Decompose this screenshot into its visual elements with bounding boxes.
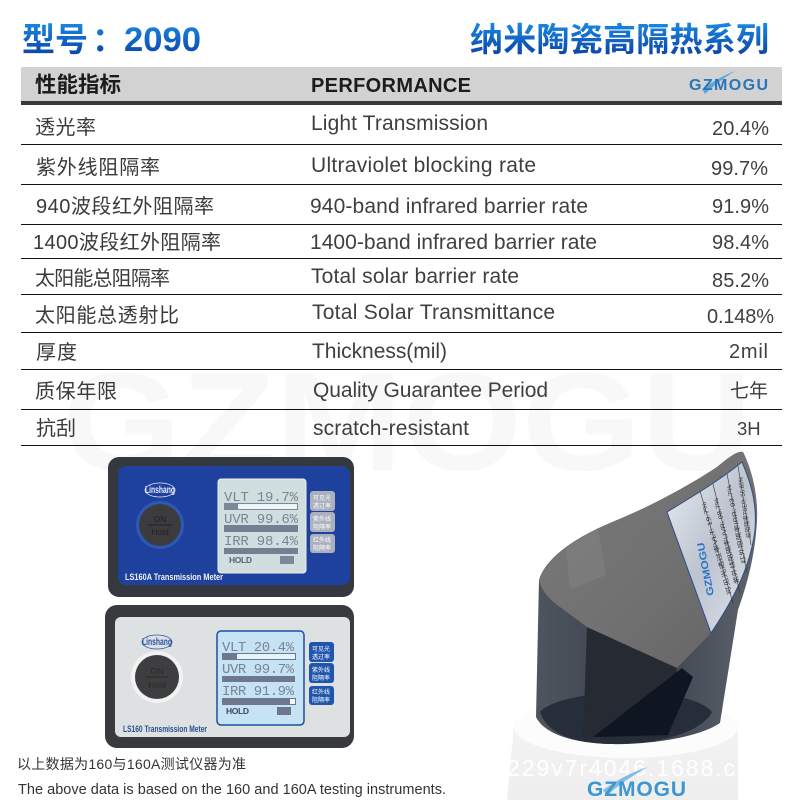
- row: guarantee period: [35, 379, 768, 403]
- film folded flap: [539, 452, 757, 668]
- meter side labels: 阻隔率: [313, 523, 331, 531]
- row: scratch resistance: 3H: [737, 418, 761, 439]
- row: 940-band infrared: 940波段红外阻隔率: [36, 195, 214, 218]
- meter power button: ON: [151, 666, 163, 676]
- meter screen: IRR 98.4%: [224, 534, 299, 550]
- row: total solar transmittance: 0.148%: [707, 306, 774, 328]
- row: 1400-band infrared: 98.4%: [712, 232, 769, 254]
- row: 940-band infrared: 940-band infrared barrier rate: [310, 195, 588, 218]
- film sample rolled: [536, 452, 757, 744]
- row: thickness: 2mil: [729, 341, 768, 363]
- watermark: large faint logo: GZMOGU: [62, 343, 752, 500]
- meter screen: UVR 99.7%: [222, 662, 295, 678]
- title: series name: 纳米陶瓷高隔热系列: [470, 21, 769, 58]
- row: thickness: [36, 340, 768, 364]
- film dark inner strip: [583, 627, 677, 737]
- row: guarantee period: Quality Guarantee Period: [313, 379, 548, 402]
- label data lines: 红外阻隔率IRR: 93.7%: [725, 483, 748, 564]
- meter logo: Linshang: [145, 485, 175, 496]
- pedestal: [507, 696, 738, 800]
- meter screen: IRR 91.9%: [222, 684, 295, 700]
- row: total solar barrier: Total solar barrier rate: [311, 265, 519, 288]
- row: total solar transmittance: [35, 301, 774, 328]
- meter logo: [142, 635, 172, 649]
- meter side labels: 可见光: [313, 494, 331, 502]
- meter side labels: 红外线: [313, 536, 331, 544]
- meter screen: [217, 631, 304, 725]
- meter side labels: 紫外线: [312, 666, 330, 674]
- title: model number: 2090: [124, 21, 201, 59]
- meter side labels: 可见光: [312, 645, 330, 653]
- title: model number: [22, 21, 201, 59]
- watermark: url text on pedestal: 229v7r4046.1688.c: [507, 755, 735, 781]
- meter side labels: 红外线: [312, 688, 330, 696]
- row: 940-band infrared: 91.9%: [712, 196, 769, 218]
- row: total solar barrier: 85.2%: [712, 270, 769, 292]
- row: scratch resistance: 抗刮: [36, 417, 76, 440]
- row: scratch resistance: [36, 417, 761, 440]
- header: English label: PERFORMANCE: [311, 75, 471, 97]
- meter model label: LS160 Transmission Meter: [123, 724, 207, 734]
- meter side labels: 阻隔率: [312, 674, 330, 682]
- meter power button: [131, 651, 183, 703]
- title: model number: 型号: [22, 21, 88, 58]
- row: thickness: 厚度: [36, 341, 77, 364]
- row: 1400-band infrared: [33, 231, 769, 254]
- row: total solar barrier: [35, 265, 769, 292]
- meter screen: HOLD: [226, 706, 249, 716]
- meter screen: VLT 19.7%: [224, 490, 299, 506]
- meter side labels: 透过率: [313, 502, 331, 510]
- film label: [667, 462, 755, 633]
- header: Chinese label: 性能指标: [35, 73, 121, 97]
- meter side labels: 紫外线: [313, 515, 331, 523]
- row: total solar transmittance: 太阳能总透射比: [35, 304, 179, 327]
- meter logo: [145, 483, 175, 497]
- row: thickness: Thickness(mil): [312, 340, 447, 363]
- meter power button: Hold: [148, 680, 166, 690]
- row: scratch resistance: scratch-resistant: [313, 417, 469, 440]
- row: light transmission: 20.4%: [712, 118, 769, 140]
- meter side labels: 透过率: [312, 653, 330, 661]
- row: 1400-band infrared: 1400-band infrared barrier rate: [310, 231, 597, 254]
- label data lines: [700, 476, 753, 596]
- film reflection highlights: [566, 528, 606, 590]
- meter side labels: 阻隔率: [313, 544, 331, 552]
- meter side labels: [310, 491, 335, 553]
- label logo: GZMOGU: [696, 541, 717, 597]
- row: light transmission: Light Transmission: [311, 112, 488, 135]
- label data lines: 总阻隔率TSER: 56.85%: [736, 476, 753, 539]
- table row lines: [21, 144, 782, 446]
- meter: LS160 silver: [105, 605, 354, 748]
- row: guarantee period: 质保年限: [35, 380, 117, 403]
- meter logo: Linshang: [142, 637, 172, 648]
- table header: [21, 67, 782, 105]
- row: total solar transmittance: Total Solar Transmittance: [312, 301, 555, 324]
- title: model number: ：: [92, 21, 125, 58]
- row: total solar barrier: 太阳能总阻隔率: [35, 267, 170, 290]
- row: ultraviolet blocking: Ultraviolet blocking rate: [311, 154, 536, 177]
- footnote: English: The above data is based on the 160 and 160A testing instruments.: [18, 782, 446, 798]
- meter screen: VLT 20.4%: [222, 640, 295, 656]
- row: 1400-band infrared: 1400波段红外阻隔率: [33, 231, 221, 254]
- meter side labels: [309, 642, 334, 705]
- meter: LS160A blue: [108, 457, 354, 597]
- meter side labels: 阻隔率: [312, 696, 330, 704]
- meter power button: ON: [154, 514, 166, 524]
- row: guarantee period: 七年: [730, 380, 768, 402]
- label data lines: 可见光透过率VLT: 19.7%: [700, 500, 734, 596]
- logo: header GZMOGU: GZMOGU: [689, 77, 768, 94]
- meter model label: LS160A Transmission Meter: [125, 572, 223, 582]
- row: light transmission: 透光率: [35, 116, 96, 139]
- meter screen: UVR 99.6%: [224, 512, 299, 528]
- footnote: Chinese: 以上数据为160与160A测试仪器为准: [17, 756, 246, 772]
- logo: pedestal GZMOGU: [587, 767, 686, 800]
- meter power button: Hold: [151, 527, 169, 537]
- meter power button: [136, 501, 184, 549]
- row: ultraviolet blocking: [36, 154, 768, 180]
- label data lines: 紫外线阻隔率UVR: 98.7%: [712, 496, 741, 584]
- meter screen: [218, 479, 306, 573]
- row: light transmission: [35, 112, 769, 140]
- meter screen: HOLD: [229, 555, 252, 565]
- film darkest reflection: [593, 668, 693, 737]
- film base shadow: [540, 692, 712, 744]
- row: ultraviolet blocking: 紫外线阻隔率: [36, 156, 160, 179]
- row: ultraviolet blocking: 99.7%: [711, 158, 768, 180]
- row: 940-band infrared: [36, 195, 769, 218]
